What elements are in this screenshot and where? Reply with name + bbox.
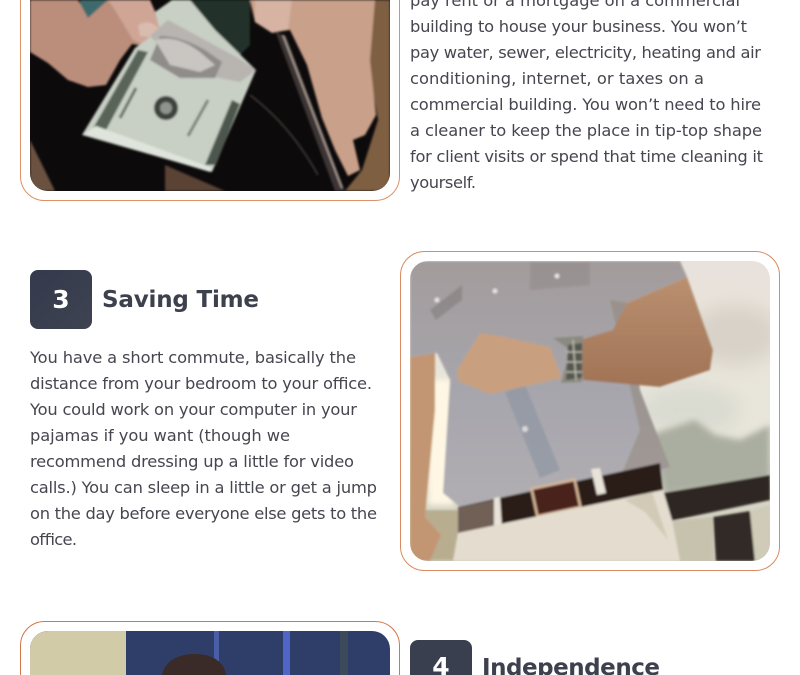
text block: saving time paragraph: distance from your bedroom to your office. <box>30 374 372 393</box>
text block: cost savings paragraph: a cleaner to keep the place in tip-top shape <box>410 121 762 140</box>
forearm <box>580 277 713 387</box>
beige wall <box>30 631 126 675</box>
sky clouds <box>702 302 770 366</box>
wallet edge <box>276 33 345 191</box>
text block: saving time paragraph: recommend dressing up a little for video <box>30 452 354 471</box>
text block: cost savings paragraph: yourself. <box>410 173 476 192</box>
text block: saving time paragraph: You have a short commute, basically the <box>29 348 356 367</box>
left arm <box>410 353 441 561</box>
wristwatch <box>553 336 583 383</box>
number badge 3: 3 <box>52 285 70 314</box>
dollar bill <box>82 0 256 172</box>
trousers <box>453 490 680 561</box>
backdrop tones <box>30 140 55 191</box>
text block: cost savings paragraph: pay water, sewer, electricity, heating and air <box>410 43 761 62</box>
bright window mullion <box>283 631 290 675</box>
distant skyline <box>650 420 770 495</box>
card border <box>20 0 400 200</box>
railing <box>663 475 770 521</box>
text block: cost savings paragraph <box>410 0 763 192</box>
number badge 4 <box>410 640 472 675</box>
card border <box>20 622 400 675</box>
text block: cost savings paragraph: for client visits or spend that time cleaning it <box>410 147 763 166</box>
text block: cost savings paragraph: conditioning, internet, or taxes on a <box>410 69 704 88</box>
window mullion <box>214 631 219 662</box>
right hand <box>250 0 376 176</box>
left hand <box>30 0 163 87</box>
photo: man checking his wristwatch <box>410 261 780 561</box>
shirt <box>410 261 687 507</box>
background ledge <box>424 509 459 561</box>
panel: watch photo card <box>400 252 780 570</box>
photo: hands taking a five dollar bill from a wallet <box>30 0 390 191</box>
panel: independence photo card <box>20 622 400 675</box>
belt <box>464 462 664 525</box>
hair <box>162 654 226 675</box>
bright glow by torso <box>428 380 454 505</box>
panel: money photo card <box>20 0 400 200</box>
text block: saving time paragraph: pajamas if you want (though we <box>30 426 290 445</box>
text block: saving time paragraph <box>29 348 377 549</box>
text block: saving time paragraph: on the day before everyone else gets to the <box>30 504 377 523</box>
card border <box>400 252 780 570</box>
text block: cost savings paragraph: building to house your business. You won’t <box>410 17 747 36</box>
heading: Saving Time: Saving Time <box>102 287 259 313</box>
dark window mullion <box>340 631 348 675</box>
photo: woman seen from behind in a blue room <box>30 631 390 675</box>
text block: cost savings paragraph: commercial building. You won’t need to hire <box>410 95 761 114</box>
text block: saving time paragraph: calls.) You can sleep in a little or get a jump <box>30 478 377 497</box>
number badge 3 <box>30 270 92 329</box>
text block: saving time paragraph: office. <box>30 530 77 549</box>
hand <box>457 333 562 394</box>
text block: saving time paragraph: You could work on your computer in your <box>29 400 357 419</box>
